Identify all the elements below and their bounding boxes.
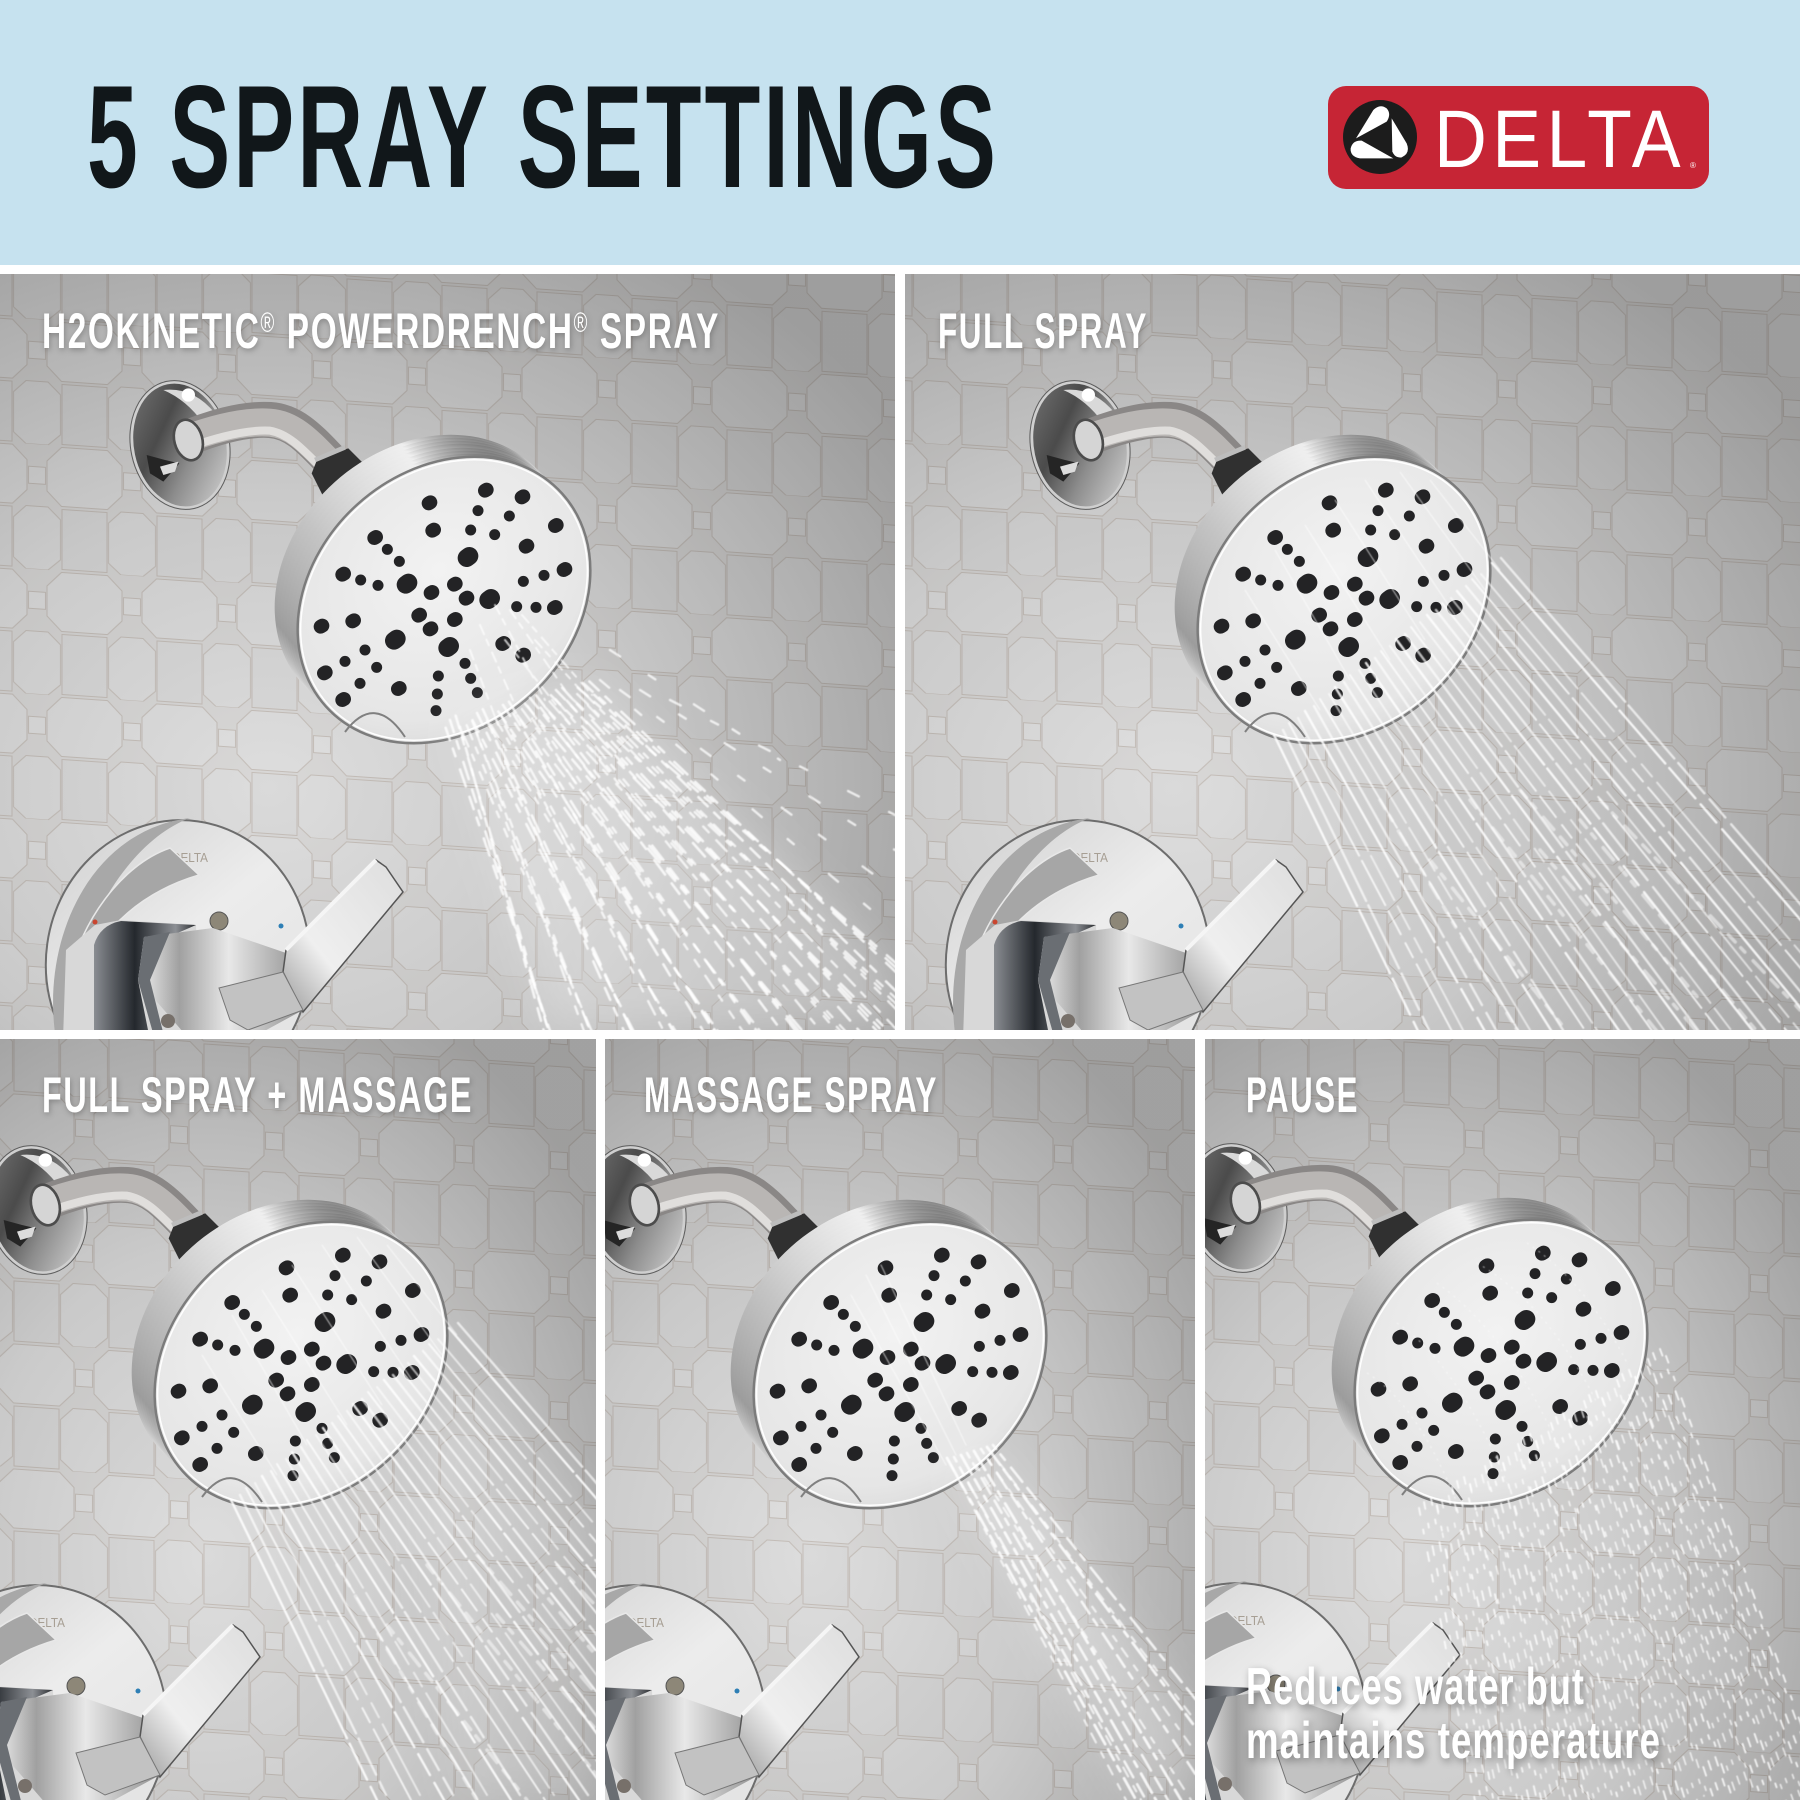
heading: H2Okinetic PowerDrench spray: ® xyxy=(574,307,589,338)
heading: pause: PAUSE xyxy=(1246,1067,1359,1123)
title: 5 SPRAY SETTINGS xyxy=(87,55,999,218)
water spray: pause trickle xyxy=(1367,1243,1800,1800)
panel: full spray + massage xyxy=(0,1039,596,1800)
panel: massage spray xyxy=(605,1039,1195,1800)
caption: reduces water: Reduces water but xyxy=(1246,1658,1585,1716)
panel: H2Okinetic PowerDrench spray xyxy=(0,274,895,1030)
logo: Delta: DELTA xyxy=(1434,94,1686,185)
heading: full spray: FULL SPRAY xyxy=(938,303,1148,359)
logo: Delta xyxy=(1328,86,1709,189)
heading: H2Okinetic PowerDrench spray: ® xyxy=(260,307,276,338)
heading: H2Okinetic PowerDrench spray: H2OKINETIC xyxy=(42,303,370,359)
panel: pause xyxy=(1205,1039,1800,1800)
water spray: narrow massage jet xyxy=(851,1265,1216,1800)
water spray: full streams with massage xyxy=(202,1237,866,1800)
logo: Delta: ® xyxy=(1690,161,1696,170)
heading: massage spray: MASSAGE SPRAY xyxy=(644,1067,938,1123)
water spray: droplet fan xyxy=(445,605,981,1061)
heading: H2Okinetic PowerDrench spray: POWERDRENCH xyxy=(276,303,574,359)
header band xyxy=(0,0,1800,265)
panel: full spray xyxy=(905,274,1800,1030)
heading: H2Okinetic PowerDrench spray: SPRAY xyxy=(589,303,720,359)
caption: reduces water xyxy=(1246,1658,1661,1770)
water spray: full streams xyxy=(1245,472,1800,1035)
heading: full spray + massage: FULL SPRAY + MASSAGE xyxy=(42,1067,473,1123)
